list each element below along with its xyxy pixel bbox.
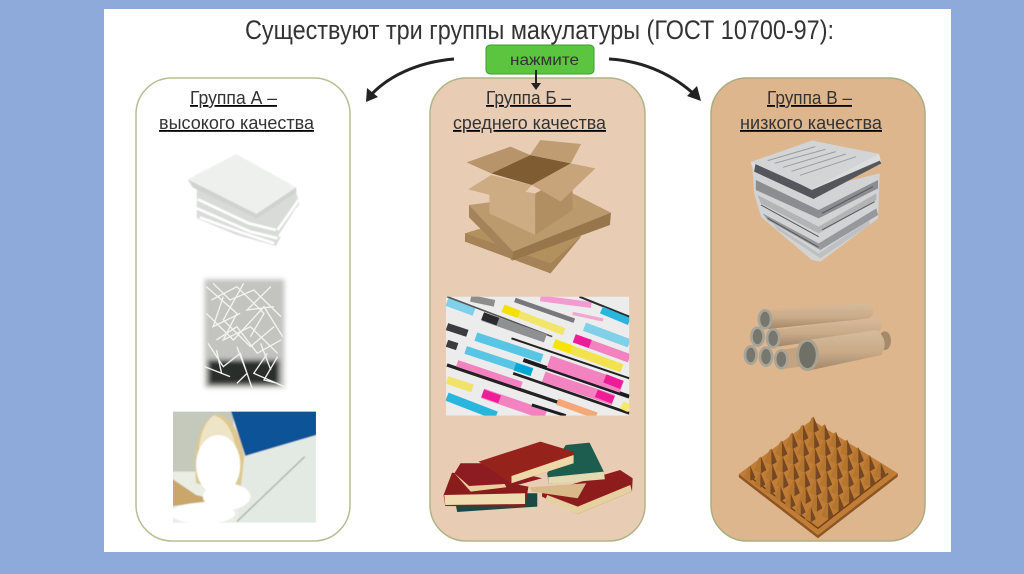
image: white paper stack	[188, 154, 299, 246]
panel: group A	[136, 78, 350, 541]
button: press	[486, 45, 594, 74]
image: shredded paper	[205, 279, 284, 388]
arrow: to group B	[531, 70, 541, 90]
image: cardboard boxes	[465, 140, 611, 273]
heading: group A: высокого качества	[159, 113, 315, 133]
image: newspapers	[751, 141, 881, 262]
heading: group A: Группа А –	[190, 88, 277, 108]
image: books	[444, 442, 633, 514]
image: egg tray	[739, 417, 898, 538]
white slide panel	[104, 9, 951, 552]
arrow: to group C	[609, 59, 701, 101]
title: Существуют три группы макулатуры (ГОСТ 10700-97):	[245, 15, 834, 45]
heading: group B: среднего качества	[453, 113, 607, 133]
heading: group A	[159, 88, 315, 133]
image: colour print strips	[446, 297, 629, 416]
panel: group C	[711, 78, 925, 541]
arrow: to group A	[366, 59, 454, 102]
heading: group C	[740, 88, 883, 133]
heading: group B	[453, 88, 607, 133]
heading: group C: Группа В –	[767, 88, 852, 108]
panel: group B	[430, 78, 645, 541]
heading: group C: низкого качества	[740, 113, 883, 133]
image: pulp and sheet	[173, 412, 316, 522]
heading: group B: Группа Б –	[486, 88, 571, 108]
button: press: нажмите	[510, 52, 579, 69]
image: cardboard tubes	[745, 303, 891, 371]
